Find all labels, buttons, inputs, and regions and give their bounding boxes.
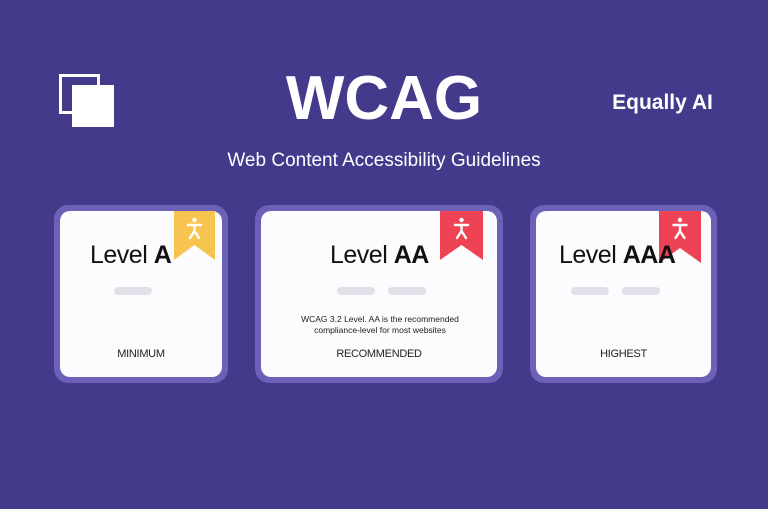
- AA description: compliance-level for most websites: [314, 325, 446, 335]
- card: level A: [54, 205, 228, 383]
- card: level AA: [255, 205, 503, 383]
- logo icon: [59, 74, 114, 127]
- ribbon A: [174, 211, 215, 260]
- heading: Level AAA: Level AAA: [559, 241, 675, 269]
- label: highest: HIGHEST: [600, 348, 647, 360]
- ribbon AA: [440, 211, 483, 260]
- title: WCAG: [286, 64, 482, 133]
- heading: Level AA: Level AA: [330, 241, 429, 269]
- label: recommended: RECOMMENDED: [336, 348, 422, 360]
- brand name: Equally AI: [612, 91, 713, 114]
- AA description: WCAG 3.2 Level. AA is the recommended: [301, 314, 459, 324]
- ribbon AAA: [659, 211, 701, 263]
- pills: [114, 287, 660, 295]
- heading: Level A: Level A: [90, 241, 171, 269]
- label: minimum: MINIMUM: [117, 348, 165, 360]
- AA description: [301, 314, 459, 335]
- card: level AAA: [530, 205, 717, 383]
- subtitle: Web Content Accessibility Guidelines: [227, 150, 541, 171]
